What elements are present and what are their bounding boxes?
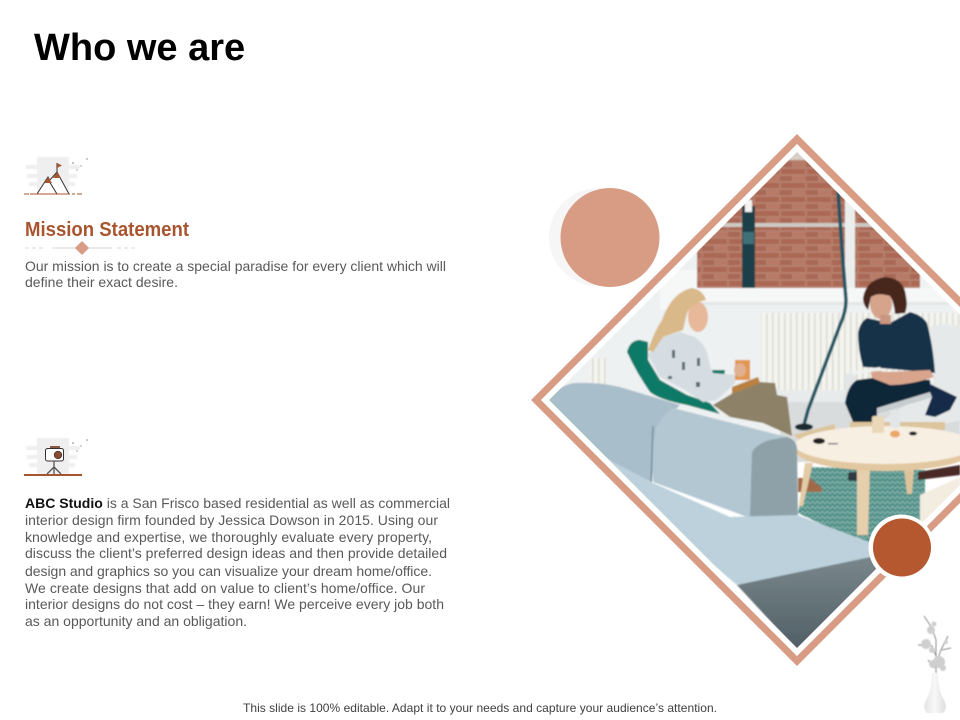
lamp pole [804, 190, 846, 425]
text block: ABC Studio description: design and graphics so you can visualize your dream home/office. [25, 563, 432, 579]
title: Who we are [34, 27, 245, 69]
text block: mission [25, 258, 446, 290]
table [793, 424, 835, 440]
window frame left [660, 301, 671, 306]
shirt marks [668, 350, 700, 387]
text block: ABC Studio description [25, 495, 450, 629]
sofa cushion left [540, 383, 680, 482]
text block: ABC Studio description: knowledge and expertise, we thoroughly evaluate every property, [25, 529, 432, 545]
jacket [925, 383, 957, 417]
right woman face [870, 289, 892, 319]
left woman shirt [648, 332, 735, 402]
sofa cushion right [653, 408, 797, 518]
sofa arm side [750, 437, 798, 518]
sofa front [737, 555, 880, 650]
left woman hair [648, 288, 706, 352]
floor [760, 390, 960, 402]
left woman pants [713, 382, 792, 436]
vase with branches [918, 616, 951, 713]
left woman face [688, 302, 708, 332]
window sill [697, 288, 960, 302]
text block: ABC Studio description: interior designs do not cost – they earn! We perceive every job both [25, 596, 444, 612]
text block: mission: Our mission is to create a special paradise for every client which will [25, 258, 446, 274]
text block: ABC Studio description: discuss the client’s preferred design ideas and then provide detailed [25, 545, 447, 561]
shoes [798, 478, 822, 492]
text block: ABC Studio description: interior design firm founded by Jessica Dowson in 2015. Using our [25, 512, 438, 528]
divider with diamond [25, 241, 138, 255]
text block: ABC Studio description: ABC Studio is a San Frisco based residential as well as commercial [25, 495, 450, 511]
radiator [761, 313, 960, 390]
icon: mountains with flag [24, 157, 88, 194]
table legs [799, 463, 813, 506]
diamond frame [536, 139, 960, 661]
photo: meeting in a living room [540, 150, 960, 650]
icon: camera on tripod [24, 438, 88, 475]
text block: ABC Studio description: as an opportunity and an obligation. [25, 613, 247, 629]
green chair [627, 340, 720, 414]
wall [564, 252, 958, 434]
table items [872, 416, 884, 433]
right woman pants [845, 377, 932, 422]
white chair [880, 324, 960, 425]
sofa seat [600, 455, 880, 585]
pale circle behind [549, 188, 647, 286]
right woman hair [863, 277, 907, 314]
right woman arm [870, 370, 934, 385]
text block: ABC Studio description: We create designs that add on value to client’s home/office. Our [25, 580, 425, 596]
brick window view [696, 152, 921, 289]
text block: mission: define their exact desire. [25, 274, 178, 290]
heading: Mission Statement: Mission Statement [25, 219, 189, 241]
footer note: This slide is 100% editable. Adapt it to your needs and capture your audience’s attention. [243, 701, 717, 715]
radiator back [592, 358, 606, 384]
rug [798, 467, 925, 545]
cream cube [918, 477, 960, 522]
book and cup [732, 377, 760, 394]
large salmon circle [560, 188, 660, 287]
right woman top [858, 312, 935, 373]
small rust circle [868, 514, 934, 580]
